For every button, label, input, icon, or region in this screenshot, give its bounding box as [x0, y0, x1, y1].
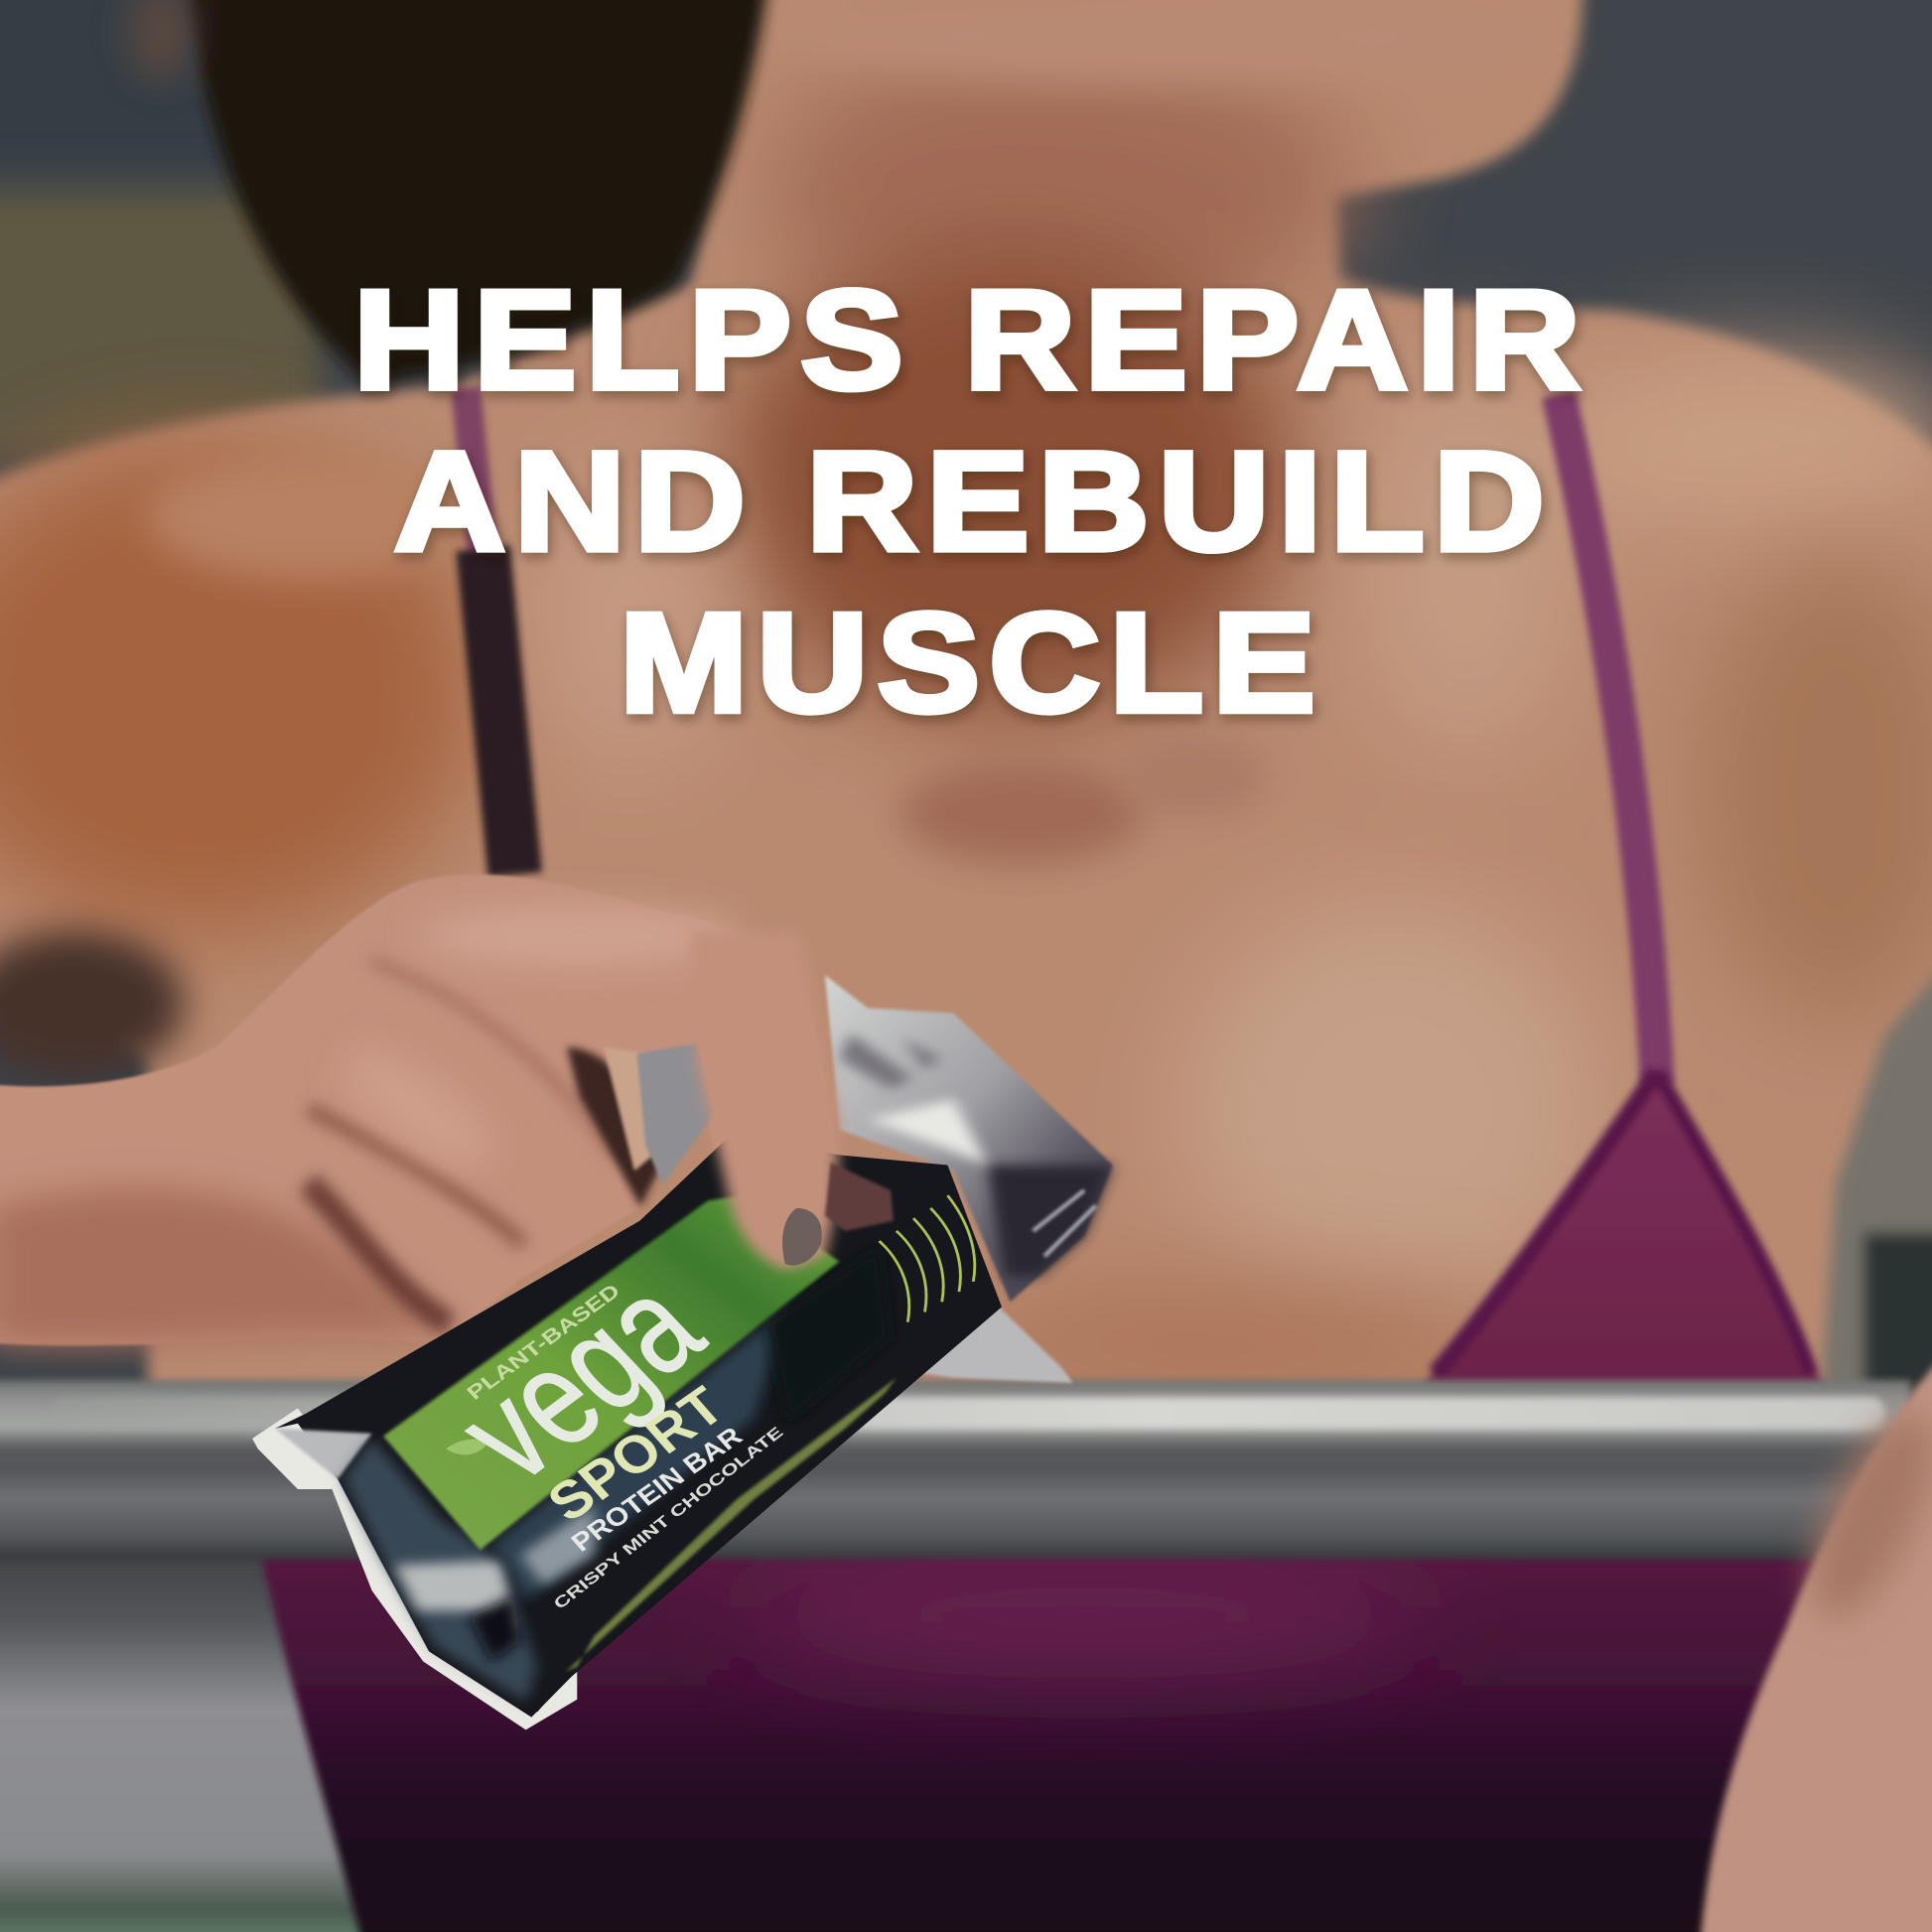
- title line 2: AND REBUILD: [394, 423, 1554, 580]
- product text: flavour: CRISPY MINT CHOCOLATE: [550, 1424, 787, 1612]
- wrapper: slate sheen lower: [344, 1439, 537, 1702]
- wrapper: green label: [383, 1195, 839, 1550]
- wrapper: small foil piece behind rail: [885, 1307, 1073, 1383]
- wrapper: tail flap extending past crop: [252, 1408, 332, 1489]
- photo: hand holding wrapper: [0, 875, 840, 1345]
- wrapper: pattern stripes: [880, 1195, 975, 1322]
- brand text: vega: vega: [428, 1249, 732, 1510]
- photo: torso, neck and shoulders: [0, 0, 1932, 1405]
- finger: thumb behind wrapper: [825, 1163, 894, 1231]
- wrapper: silver foil behind fingers: [637, 1043, 714, 1185]
- photo: right forearm: [1698, 1337, 1932, 1932]
- product text: sport: SPORT: [535, 1375, 736, 1533]
- wrapper: dark body: [275, 1135, 1002, 1718]
- title line 1: HELPS REPAIR: [353, 261, 1589, 418]
- title: helps repair and rebuild muscle: [353, 261, 1589, 741]
- photo: barbell rail: [0, 1380, 1910, 1559]
- title line 3: MUSCLE: [620, 584, 1324, 741]
- photo: dark short hair: [131, 0, 770, 384]
- wrapper: green lower trim: [566, 1378, 897, 1672]
- wrapper: torn foil end: [825, 975, 1113, 1302]
- photo: maroon sports top lower: [261, 1555, 1824, 1932]
- wrapper: leaf mark: [446, 1440, 488, 1454]
- wrapper: blue sheen band: [491, 1307, 788, 1600]
- finger: painted nail: [782, 1208, 822, 1266]
- photo: left strap: [466, 388, 515, 875]
- photo: maroon sports top upper: [1423, 1072, 1824, 1386]
- photo: background gap right of torso: [1821, 949, 1932, 1392]
- wrapper: white torn seal edge: [264, 1414, 577, 1729]
- finger: index finger over wrapper: [691, 932, 839, 1271]
- photo: right strap: [1559, 394, 1657, 1084]
- brand text: plant-based: PLANT-BASED: [463, 1280, 624, 1404]
- product: protein bar wrapper: [252, 932, 1113, 1729]
- wrapper: silver crimp corner: [275, 1429, 372, 1479]
- product text: protein bar: PROTEIN BAR: [565, 1421, 749, 1557]
